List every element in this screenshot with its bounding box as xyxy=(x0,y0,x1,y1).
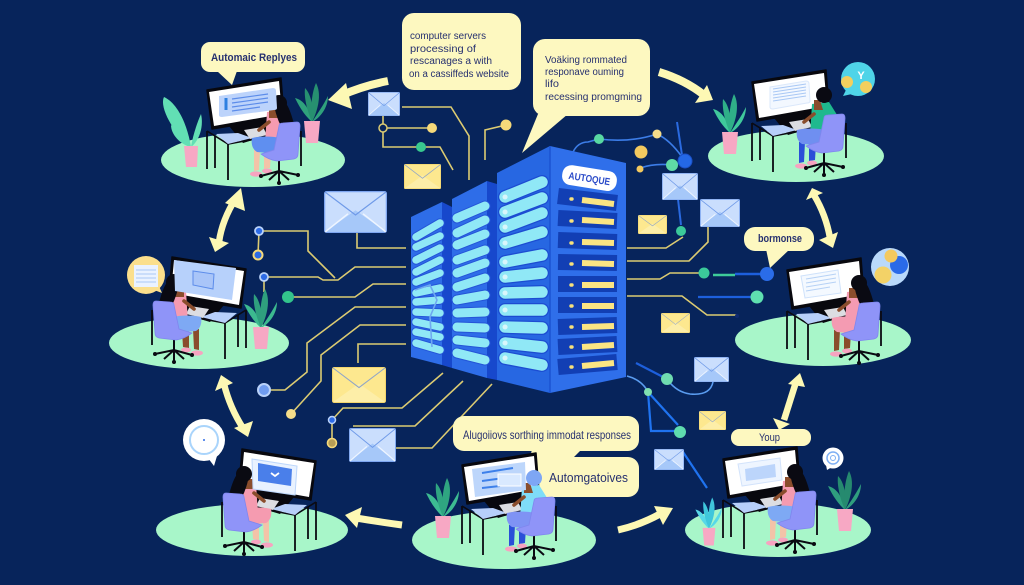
screen content xyxy=(472,462,526,497)
plant xyxy=(426,478,459,538)
arrow: right side lower double xyxy=(773,373,805,430)
bubble: Working automated: responave ouming xyxy=(545,67,624,78)
bubble: Automatic Replies xyxy=(201,42,305,85)
workstation 7: bottom right xyxy=(685,447,871,557)
desk and person xyxy=(222,449,316,556)
plant xyxy=(713,94,746,154)
tower 2 xyxy=(452,181,497,380)
bubble: Working automated: recessing promgming xyxy=(545,92,642,103)
screen content xyxy=(801,270,841,298)
plant xyxy=(695,498,722,546)
bubble: Youp xyxy=(731,429,811,446)
arrow: left side upper double xyxy=(209,188,245,252)
workstation 2: top right xyxy=(708,62,884,182)
circuit nodes: left and top xyxy=(254,120,512,448)
screen content xyxy=(738,458,782,486)
server rack xyxy=(411,146,626,393)
arrow: left side lower double xyxy=(215,375,253,437)
workstation 5: bottom left xyxy=(156,419,348,556)
bubble: Algorithms sorting xyxy=(453,416,639,459)
desk and person xyxy=(207,78,301,185)
bubble: Response: bormonse xyxy=(758,233,802,245)
bubble: Working automated xyxy=(522,39,650,153)
tower 3 xyxy=(497,146,626,393)
server units xyxy=(558,196,617,367)
bubble: computer servers: rescanages a with xyxy=(410,56,492,67)
bubble: Algorithms sorting: Alugoiiovs sorthing immodat responses xyxy=(463,428,631,442)
circuit lines: left and top xyxy=(258,107,737,448)
screen content xyxy=(252,459,297,495)
desk and person xyxy=(152,257,246,364)
workstation 6: bottom center xyxy=(412,453,596,569)
arrow: to bottom-left workstation xyxy=(345,507,402,528)
chat icon xyxy=(841,62,875,96)
bubble: Youp: Youp xyxy=(759,432,780,444)
plant xyxy=(163,97,202,167)
chat icon: Y xyxy=(857,70,865,82)
bubble: computer servers xyxy=(402,13,521,90)
bubble: Automgatoives xyxy=(520,457,639,497)
server label: AUTOQUE xyxy=(568,171,611,188)
bubble: Automgatoives: Automgatoives xyxy=(549,471,628,485)
workstation 3: middle left xyxy=(109,256,289,369)
server label xyxy=(561,164,618,192)
plant xyxy=(295,83,328,143)
arrow: to bottom-right workstation xyxy=(618,506,673,530)
workstation 1: top left xyxy=(161,78,345,187)
screen content xyxy=(219,88,277,117)
plant xyxy=(828,471,861,531)
bubble: computer servers: computer servers xyxy=(410,31,486,42)
arrow: to top-left workstation xyxy=(328,81,388,109)
bubble: Working automated: lifo xyxy=(545,79,559,90)
target bubble xyxy=(183,419,225,466)
bubble: Working automated: Voäking rommated xyxy=(545,55,627,66)
bubble: computer servers: on a cassiffeds website xyxy=(409,69,509,80)
screen content xyxy=(770,81,810,109)
target bubble xyxy=(822,448,844,470)
bubble: Response xyxy=(744,227,814,268)
desk and person xyxy=(723,447,817,554)
circuit lines and nodes: right xyxy=(573,122,774,488)
screen content xyxy=(174,260,236,300)
bubble: Automatic Replies: Automaic Replyes xyxy=(211,52,297,64)
plant xyxy=(244,289,277,349)
bubble: computer servers: processing of xyxy=(410,44,476,55)
note bubble xyxy=(127,256,165,294)
envelopes xyxy=(325,92,740,470)
tower 1 xyxy=(411,202,452,368)
workstation 4: middle right xyxy=(735,248,911,366)
arrow: right side upper double xyxy=(806,188,838,248)
desk and person xyxy=(462,453,556,560)
chat icon xyxy=(871,248,909,286)
desk and person xyxy=(787,258,881,365)
arrow: to top-right workstation xyxy=(659,72,713,103)
desk and person xyxy=(752,70,846,177)
